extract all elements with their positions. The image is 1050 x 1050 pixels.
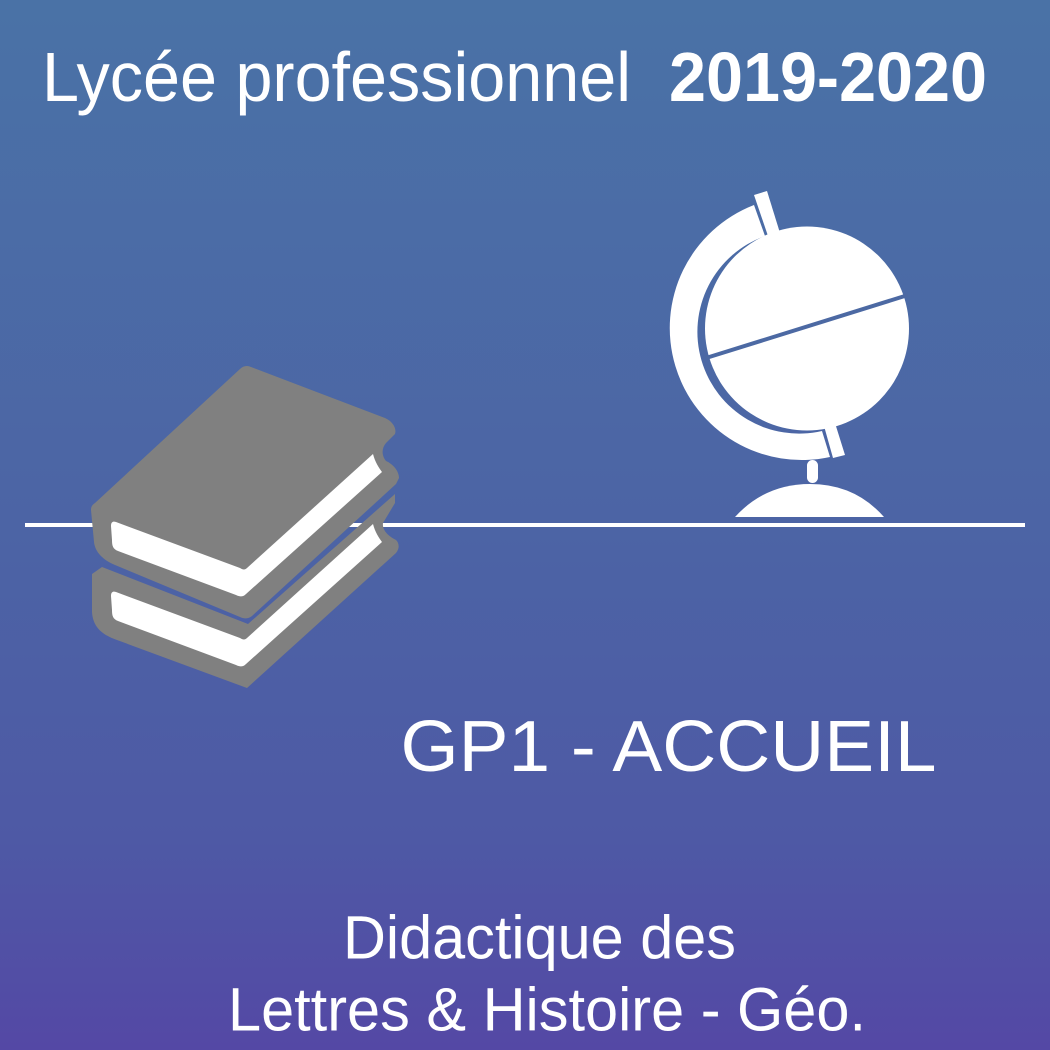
globe axis bottom [824, 423, 845, 458]
heading: GP1 - ACCUEIL: GP1 - ACCUEIL [400, 707, 936, 787]
subtitle [228, 904, 866, 1044]
upper book [91, 366, 399, 618]
globe arm [670, 205, 830, 460]
lower book [92, 494, 399, 688]
globe pin [807, 460, 818, 483]
subtitle: Didactique des [343, 904, 736, 972]
subtitle: Lettres & Histoire - Géo. [228, 976, 866, 1044]
icon: globe [670, 191, 909, 517]
title: Lycée professionnel [42, 38, 631, 116]
horizon line [25, 523, 1025, 527]
globe base [735, 484, 884, 517]
title: 2019-2020 [669, 38, 987, 116]
globe axis top [754, 191, 780, 236]
icon: stacked books [91, 366, 399, 688]
globe equator [706, 295, 908, 358]
globe sphere [705, 226, 909, 430]
title [42, 38, 987, 116]
